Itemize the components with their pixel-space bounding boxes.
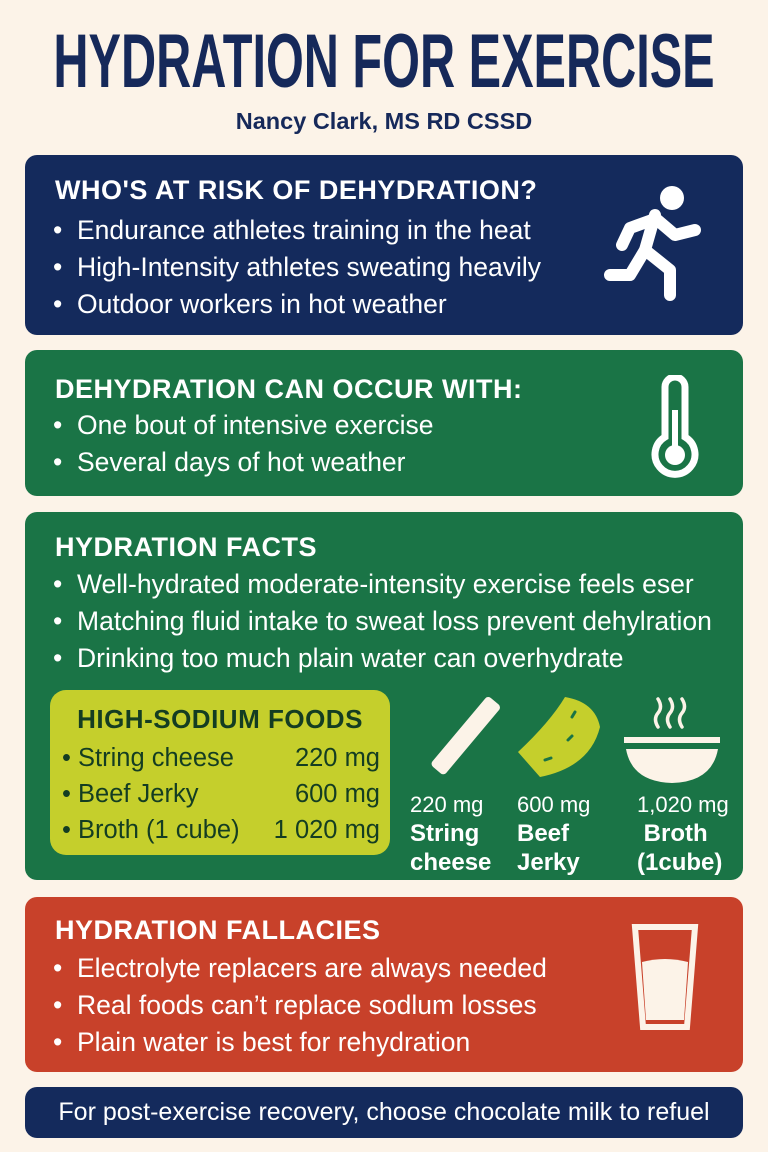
panel: hydration facts: Matching fluid intake to sweat loss prevent dehylration <box>77 606 712 636</box>
panel: hydration facts: Well-hydrated moderate-intensity exercise feels eser <box>77 569 694 599</box>
labels: foods: 220 mg <box>410 792 483 817</box>
title: HYDRATION FOR EXERCISE <box>53 19 715 104</box>
panel: dehydration can occur <box>25 350 743 496</box>
footer banner <box>25 1087 743 1138</box>
panel: hydration facts <box>25 512 743 880</box>
panel: dehydration can occur: Several days of hot weather <box>77 447 406 477</box>
panel: fallacies: Real foods can’t replace sodlum losses <box>77 990 537 1020</box>
labels: foods: String <box>410 820 479 847</box>
panel: hydration facts: Jerky <box>517 849 580 876</box>
panel: hydration facts: Broth <box>644 820 708 847</box>
icon: broth bowl <box>624 697 720 783</box>
box: high-sodium foods: • Broth (1 cube) <box>62 816 240 844</box>
box: high-sodium foods: 220 mg <box>295 744 380 772</box>
panel: hydration facts: (1cube) <box>637 849 722 876</box>
labels: foods: cheese <box>410 849 491 876</box>
icon: runner <box>604 186 701 301</box>
panel: hydration facts: 1,020 mg <box>637 792 729 817</box>
box: high-sodium foods: • Beef Jerky <box>62 780 198 808</box>
list: Outdoor workers in hot weather <box>77 289 447 319</box>
labels: foods <box>410 792 491 876</box>
panel: hydration facts: HYDRATION FACTS <box>55 532 317 562</box>
panel: dehydration can occur: One bout of intensive exercise <box>77 410 433 440</box>
panel: hydration facts: Beef <box>517 820 569 847</box>
heading: WHO'S AT RISK OF DEHYDRATION? <box>55 175 537 205</box>
panel: hydration facts: 600 mg <box>517 792 590 817</box>
panel: fallacies: Plain water is best for rehydration <box>77 1027 470 1057</box>
panel: who's at risk <box>25 155 743 335</box>
list: Endurance athletes training in the heat <box>77 215 531 245</box>
panel: fallacies: Electrolyte replacers are always needed <box>77 953 547 983</box>
panel: dehydration can occur: DEHYDRATION CAN OCCUR WITH: <box>55 374 522 404</box>
box: high-sodium foods <box>50 690 390 855</box>
subtitle: Nancy Clark, MS RD CSSD <box>236 108 532 134</box>
panel: fallacies <box>25 897 743 1072</box>
box: high-sodium foods: 600 mg <box>295 780 380 808</box>
footer banner: For post-exercise recovery, choose chocolate milk to refuel <box>58 1098 710 1126</box>
box: high-sodium foods: HIGH-SODIUM FOODS <box>77 704 363 734</box>
list: High-Intensity athletes sweating heavily <box>77 252 541 282</box>
box: high-sodium foods: 1 020 mg <box>274 816 380 844</box>
icon: thermometer <box>651 375 699 478</box>
icon: string cheese <box>432 697 500 774</box>
box: high-sodium foods: • String cheese <box>62 744 234 772</box>
icon: glass <box>632 924 698 1030</box>
list <box>54 215 541 319</box>
icon: jerky <box>518 697 600 777</box>
panel: hydration facts: Drinking too much plain water can overhydrate <box>77 643 623 673</box>
panel: fallacies: HYDRATION FALLACIES <box>55 915 380 945</box>
